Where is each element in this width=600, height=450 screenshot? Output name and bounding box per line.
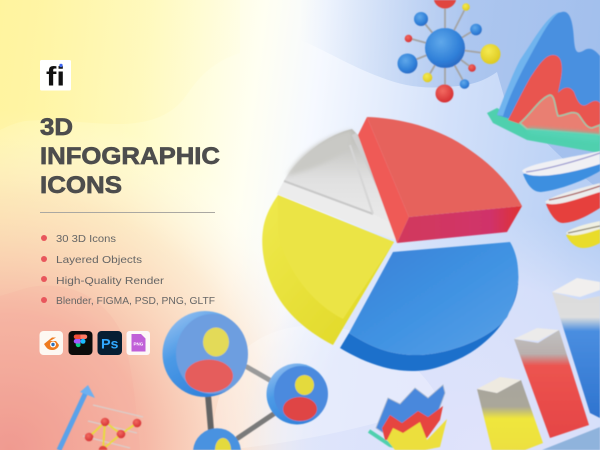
connectors xyxy=(208,367,275,438)
yellow disc xyxy=(566,221,600,248)
mini area chart icon xyxy=(369,385,447,450)
red disc xyxy=(545,183,600,223)
icon: photoshop xyxy=(98,331,122,355)
blue disc xyxy=(522,151,600,192)
bottom node xyxy=(193,428,241,450)
title xyxy=(40,114,220,199)
feature list: High-Quality Render xyxy=(56,275,165,287)
line chart icon with arrow xyxy=(59,385,143,450)
blue slice xyxy=(340,242,518,371)
feature list: Layered Objects xyxy=(56,254,142,266)
molecule icon xyxy=(398,0,500,102)
yellow bar xyxy=(477,377,543,450)
pie chart xyxy=(262,117,522,371)
title: INFOGRAPHIC xyxy=(40,143,220,170)
red bar xyxy=(514,328,589,438)
feature list: 30 3D Icons xyxy=(56,233,116,245)
feature list: Blender, FIGMA, PSD, PNG, GLTF xyxy=(56,295,215,307)
network icon xyxy=(162,311,328,450)
icon: blender xyxy=(40,331,63,355)
logo: fi xyxy=(46,62,65,92)
title: ICONS xyxy=(40,172,122,199)
bar chart icon xyxy=(477,278,600,450)
silver slice xyxy=(277,129,398,240)
icon: png file xyxy=(126,331,150,355)
blue bar xyxy=(552,278,600,418)
logo xyxy=(40,60,71,92)
right node xyxy=(266,364,328,424)
yellow slice xyxy=(262,195,394,345)
feature list xyxy=(41,233,215,307)
title: 3D xyxy=(40,114,73,141)
icon: png file: PNG xyxy=(134,342,144,346)
large node xyxy=(162,311,248,397)
icon: photoshop: Ps xyxy=(101,336,119,352)
area chart icon xyxy=(487,12,600,153)
funnel icon xyxy=(522,151,600,248)
red slice xyxy=(358,117,522,243)
icon: figma xyxy=(68,331,92,355)
